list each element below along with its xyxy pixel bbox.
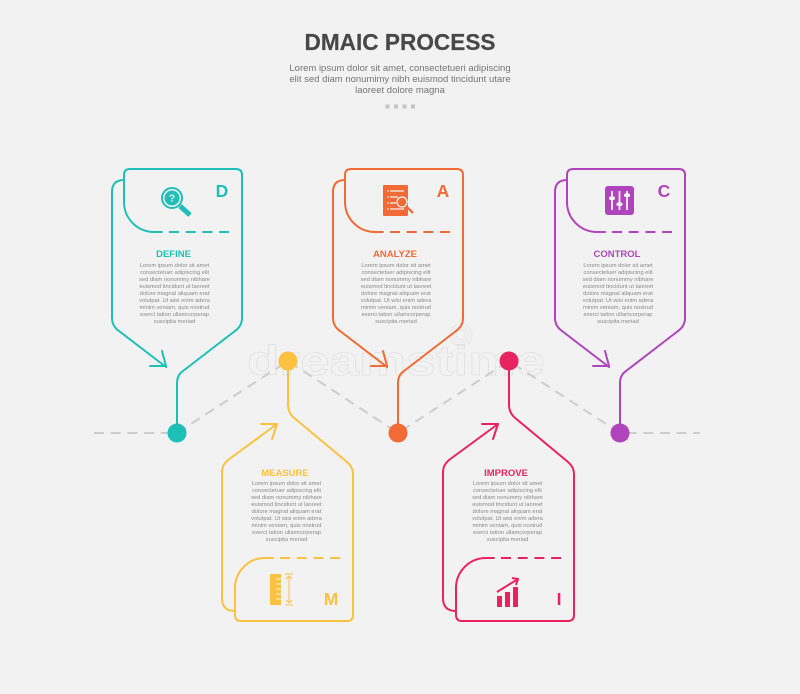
improve outline	[443, 361, 574, 621]
analyze body text: sed diam nonummy nibhare	[361, 277, 431, 283]
panel: define	[112, 169, 242, 442]
title divider dots	[386, 104, 415, 108]
define body text: suscipita meriad	[154, 319, 195, 325]
subtitle text block	[289, 63, 511, 96]
improve body text: dolore magnal aliquam erat	[473, 509, 543, 515]
measure letter: M	[324, 589, 338, 609]
analyze body text: suscipita meriad	[375, 319, 417, 325]
icon: magnifier with question mark: ?	[169, 194, 175, 204]
analyze body text: exerci tation ullamcorperap	[361, 312, 431, 318]
control body text: suscipita meriad	[597, 319, 639, 325]
icon: sliders	[605, 186, 634, 215]
analyze body text: volutpat. Ut wisi enim adera	[361, 298, 432, 304]
improve body text	[472, 481, 544, 543]
icon: magnifier with question mark	[162, 188, 190, 215]
control body text	[583, 263, 654, 325]
define body text: euismod tincidunt ut laoreet	[139, 284, 210, 290]
subtitle text block: Lorem ipsum dolor sit amet, consectetueri adipiscing	[289, 63, 511, 74]
measure body text: Lorem ipsum dolor sit amet	[252, 481, 322, 487]
define body text: sed diam nonummy nibhare	[139, 277, 210, 283]
analyze heading: ANALYZE	[373, 249, 417, 260]
control letter: C	[658, 181, 671, 201]
control body text: minim veniam, quis nostrud	[583, 305, 653, 311]
improve body text: sed diam nonummy nibhare	[472, 495, 543, 501]
measure body text: dolore magnal aliquam erat	[252, 509, 322, 515]
measure heading: MEASURE	[261, 468, 309, 479]
control body text: exerci tation ullamcorperap	[583, 312, 653, 318]
icon: rising bar chart	[497, 578, 518, 607]
define body text: minim veniam, quis nostrud	[140, 305, 210, 311]
analyze body text: minim veniam, quis nostrud	[361, 305, 431, 311]
define body text: dolore magnal aliquam erat	[140, 291, 210, 297]
analyze body text: Lorem ipsum dolor sit amet	[361, 263, 431, 269]
improve body text: minim veniam, quis nostrud	[472, 523, 542, 529]
title: DMAIC PROCESS	[304, 29, 496, 55]
measure body text: exerci tation ullamcorperap	[252, 530, 321, 536]
measure outline	[222, 361, 353, 621]
analyze letter: A	[437, 181, 450, 201]
measure body text: sed diam nonummy nibhare	[251, 495, 322, 501]
define body text: volutpat. Ut wisi enim adera	[139, 298, 211, 304]
improve node	[500, 352, 518, 370]
panel: control	[555, 169, 685, 442]
watermark	[247, 324, 545, 384]
define body text: exerci tation ullamcorperap	[140, 312, 209, 318]
improve body text: Lorem ipsum dolor sit amet	[473, 481, 543, 487]
measure body text: euismod tincidunt ut laoreet	[251, 502, 322, 508]
define body text: consectetuer adipiscing elit	[140, 270, 209, 276]
watermark: dreamstime	[247, 337, 545, 384]
dashed timeline	[94, 361, 700, 433]
measure body text: minim veniam, quis nostrud	[252, 523, 322, 529]
control body text: dolore magnal aliquam erat	[583, 291, 653, 297]
subtitle text block: laoreet dolore magna	[355, 85, 446, 96]
panel: measure	[222, 352, 353, 621]
analyze body text: consectetuer adipiscing elit	[361, 270, 431, 276]
control body text: sed diam nonummy nibhare	[583, 277, 653, 283]
icon: document with magnifier	[383, 185, 413, 216]
analyze body text: dolore magnal aliquam erat	[361, 291, 431, 297]
icon: ruler with height arrow	[270, 574, 293, 605]
analyze body text	[361, 263, 432, 325]
measure body text: suscipita meriad	[266, 537, 307, 543]
control heading: CONTROL	[594, 249, 641, 260]
measure body text: consectetuer adipiscing elit	[252, 488, 321, 494]
improve body text: euismod tincidunt ut laoreet	[472, 502, 543, 508]
control body text: volutpat. Ut wisi enim adera	[583, 298, 654, 304]
improve body text: exerci tation ullamcorperap	[473, 530, 542, 536]
define outline	[112, 169, 242, 433]
measure body text	[251, 481, 323, 543]
control body text: Lorem ipsum dolor sit amet	[583, 263, 653, 269]
measure body text: volutpat. Ut wisi enim adera	[251, 516, 323, 522]
analyze body text: euismod tincidunt ut laoreet	[361, 284, 432, 290]
define body text: Lorem ipsum dolor sit amet	[140, 263, 210, 269]
panel: analyze	[333, 169, 463, 442]
panel: improve	[443, 352, 574, 621]
define letter: D	[216, 181, 228, 201]
control node	[610, 424, 630, 442]
improve body text: volutpat. Ut wisi enim adera	[472, 516, 544, 522]
subtitle text block: elit sed diam nonumimy nibh euismod tincidunt utare	[289, 74, 511, 85]
improve heading: IMPROVE	[484, 468, 528, 479]
control body text: consectetuer adipiscing elit	[583, 270, 653, 276]
measure node	[278, 352, 298, 370]
improve body text: consectetuer adipiscing elit	[473, 488, 542, 494]
define body text	[139, 263, 211, 325]
improve body text: suscipita meriad	[487, 537, 528, 543]
analyze outline	[333, 169, 463, 433]
control body text: euismod tincidunt ut laoreet	[583, 284, 654, 290]
analyze node	[388, 424, 408, 442]
define heading: DEFINE	[156, 249, 191, 260]
improve letter: I	[557, 589, 561, 609]
control outline	[555, 169, 685, 433]
define node	[168, 424, 186, 442]
